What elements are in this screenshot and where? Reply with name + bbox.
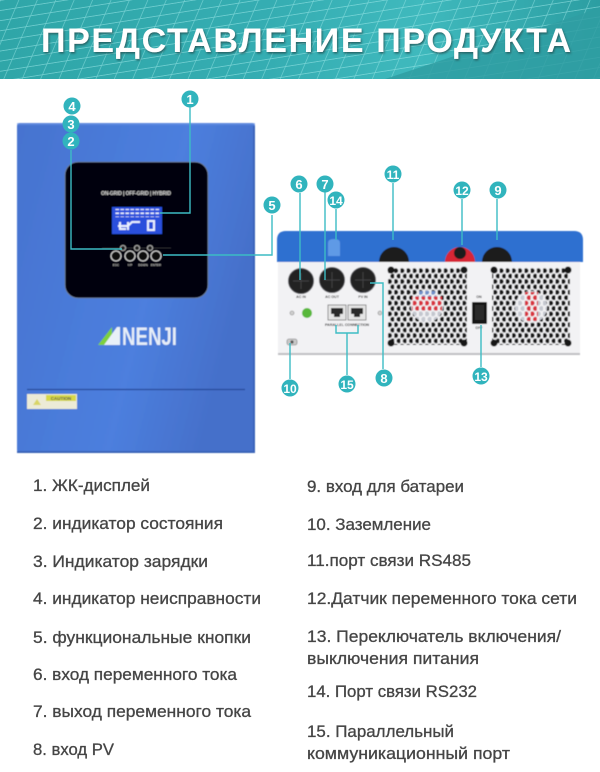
legend left column: 3. Индикатор зарядки	[33, 552, 208, 571]
legend right column: 9. вход для батареи	[307, 477, 464, 496]
control panel: ON-GRID | OFF-GRID | HYBRID	[101, 191, 171, 197]
green terminal	[302, 308, 312, 318]
legend right column: 12.Датчик переменного тока сети	[307, 589, 577, 608]
number badges: 14	[329, 194, 343, 208]
fan grille right	[490, 266, 572, 346]
number badges: 4	[68, 99, 76, 114]
number badges: 2	[67, 134, 75, 149]
function buttons	[111, 251, 161, 261]
button captions: ENTER	[151, 263, 162, 267]
legend left column: 7. выход переменного тока	[33, 702, 252, 721]
gland labels: PV IN	[358, 295, 368, 299]
number badges: 13	[474, 370, 488, 384]
number badges: 7	[321, 177, 329, 192]
button captions: ESC	[113, 263, 120, 267]
legend right column	[307, 477, 577, 763]
gland labels: AC OUT	[325, 295, 340, 299]
legend right column: выключения питания	[307, 649, 479, 668]
top ports	[328, 239, 512, 262]
callout lines	[71, 107, 497, 379]
power switch: OFF	[475, 326, 483, 330]
number badges: 12	[455, 184, 469, 198]
number badges: 1	[186, 92, 194, 107]
caution label	[27, 394, 77, 409]
number badges: 3	[67, 117, 75, 132]
cable glands	[288, 268, 376, 294]
control panel	[65, 162, 208, 298]
header banner	[0, 0, 600, 79]
rear view of inverter	[277, 231, 583, 355]
legend right column: 14. Порт связи RS232	[307, 682, 477, 701]
number badges: 15	[340, 378, 354, 392]
title: ПРЕДСТАВЛЕНИЕ ПРОДУКТА	[41, 22, 571, 60]
gland labels	[296, 295, 368, 299]
legend left column: 5. функциональные кнопки	[33, 628, 251, 647]
legend right column: 10. Заземление	[307, 515, 431, 534]
gland labels: AC IN	[296, 295, 306, 299]
number badges	[62, 90, 506, 396]
RJ45 parallel ports	[325, 305, 369, 327]
caution label: CAUTION	[51, 396, 71, 401]
number badges: 6	[295, 177, 303, 192]
legend right column: коммуникационный порт	[307, 744, 510, 763]
legend left column: 2. индикатор состояния	[33, 514, 223, 533]
legend left column: 8. вход PV	[33, 740, 115, 759]
number badges: 9	[494, 183, 502, 198]
RJ45 parallel ports: PARALLEL CONNECTION	[325, 323, 369, 327]
number badges: 11	[387, 168, 400, 182]
legend left column: 1. ЖК-дисплей	[33, 476, 150, 495]
ground lug	[287, 339, 297, 345]
legend right column: 11.порт связи RS485	[307, 551, 471, 570]
legend left column: 6. вход переменного тока	[33, 665, 238, 684]
number badges: 8	[380, 371, 388, 386]
status indicators	[102, 245, 171, 251]
LCD display	[112, 207, 162, 234]
legend right column: 13. Переключатель включения/	[307, 627, 561, 646]
power switch	[472, 295, 487, 330]
power switch: ON	[476, 295, 482, 299]
button captions	[113, 263, 162, 267]
legend left column	[33, 476, 261, 759]
button captions: UP	[128, 263, 132, 267]
number badges: 10	[283, 382, 297, 396]
button captions: DOWN	[138, 263, 148, 267]
brand logo	[98, 323, 177, 351]
legend right column: 15. Параллельный	[307, 722, 454, 741]
fan grille left	[388, 266, 468, 346]
panel seam	[27, 388, 245, 390]
screws	[290, 311, 382, 315]
number badges: 5	[268, 198, 276, 213]
legend left column: 4. индикатор неисправности	[33, 589, 261, 608]
front view of inverter	[17, 123, 255, 453]
brand logo: NENJI	[122, 323, 177, 351]
